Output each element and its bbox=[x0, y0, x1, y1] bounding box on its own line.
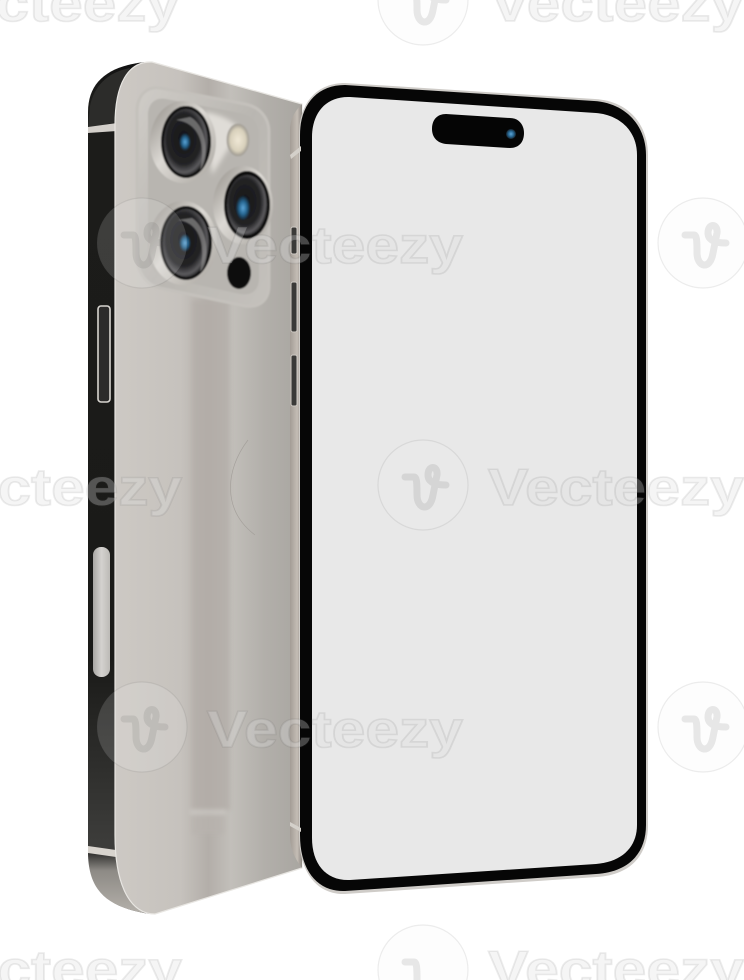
watermark row 1 bbox=[0, 0, 744, 45]
front camera bbox=[506, 129, 516, 139]
frame notch marks bbox=[290, 146, 301, 832]
lens: top bbox=[150, 101, 216, 183]
flash bbox=[227, 124, 249, 156]
metal frame bbox=[299, 83, 648, 894]
watermark row 2 bbox=[97, 198, 744, 288]
watermark row 2: Vecteezy bbox=[207, 217, 463, 275]
lens: right bbox=[213, 166, 273, 244]
lens: bottom bbox=[149, 201, 217, 285]
right frame edge bbox=[290, 104, 302, 868]
front phone bbox=[290, 83, 648, 894]
centre reflection strip bbox=[190, 300, 230, 834]
watermark row 5 bbox=[0, 925, 744, 980]
power button bbox=[98, 306, 110, 402]
watermark row 3: Vecteezy bbox=[488, 459, 744, 517]
watermark row 4 bbox=[97, 682, 744, 772]
volume buttons bbox=[291, 227, 297, 406]
side edge band bbox=[88, 62, 160, 914]
back phone bbox=[88, 62, 302, 914]
dynamic island bbox=[432, 114, 524, 148]
charging pill bbox=[93, 547, 110, 677]
watermark row 4: Vecteezy bbox=[207, 701, 463, 759]
black bezel bbox=[300, 85, 646, 891]
logo outline on back bbox=[230, 440, 255, 535]
sensor bbox=[227, 257, 251, 289]
screen bbox=[312, 97, 637, 880]
watermark row 3 bbox=[0, 440, 744, 530]
camera module bbox=[137, 88, 273, 306]
module plate bbox=[137, 88, 269, 306]
back panel bbox=[115, 62, 302, 914]
